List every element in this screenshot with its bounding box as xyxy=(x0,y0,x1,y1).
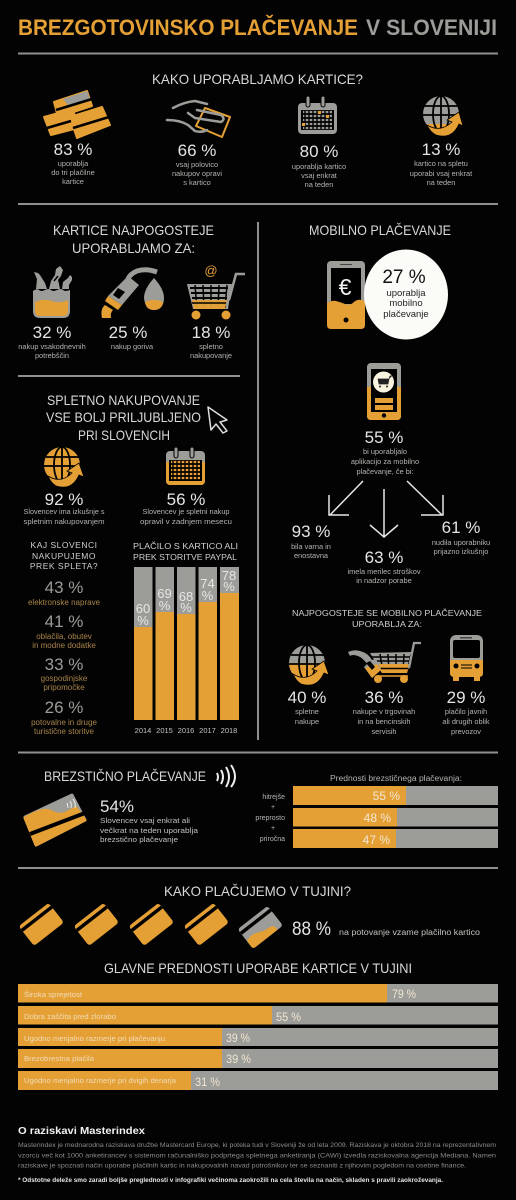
stat 88: 88 % xyxy=(292,919,331,940)
stat 55: plačevanje, če bi: xyxy=(356,467,414,476)
bar 2016: 68 xyxy=(179,589,193,604)
stat 54: večkrat na teden uporablja xyxy=(100,826,199,835)
heading: KARTICE NAJPOGOSTEJE xyxy=(53,222,214,238)
item 41: oblačila, obutev xyxy=(36,632,92,641)
stat 36: in na bencinskih xyxy=(357,717,411,726)
icon: calendar xyxy=(298,96,337,134)
panel: brezstično plačevanje xyxy=(25,765,498,848)
bar 39 b: Brezobrestna plačila xyxy=(24,1054,95,1063)
bar 2015: 69 xyxy=(157,586,172,601)
list: kaj slovenci nakupujemo xyxy=(28,540,101,736)
footer text: Masterindex je mednarodna raziskava družbe Mastercard Europe, ki poteka tudi v Sloveniji že od leta 2009. Raziskava je oktobra 2018 na reprezentativnem xyxy=(18,1143,496,1149)
bar 2015: % xyxy=(159,598,171,613)
stat 54: 54% xyxy=(100,797,134,816)
stat 54 xyxy=(100,797,199,844)
heading: UPORABLJAMO ZA: xyxy=(72,240,195,256)
arrow: left xyxy=(329,481,363,515)
bar preprosto: preprosto xyxy=(255,815,285,822)
chart title: Prednosti brezstičnega plačevanja: xyxy=(330,774,462,783)
list heading xyxy=(30,540,98,571)
bar preprosto xyxy=(255,808,498,826)
heading: BREZSTIČNO PLAČEVANJE xyxy=(44,768,206,784)
bar 2014 xyxy=(134,567,152,735)
chart heading xyxy=(133,541,238,562)
stat 63 xyxy=(347,548,421,585)
bar 55: Dobra zaščita pred zlorabo xyxy=(24,1012,116,1021)
stat 29: plačilo javnih xyxy=(445,707,487,716)
callout: 27 %: uporablja xyxy=(386,288,426,299)
bar 2015 xyxy=(156,567,174,735)
icon: calendar orange xyxy=(166,447,205,485)
icon: cart with at sign xyxy=(187,263,245,320)
bar chart: plačilo s kartico ali paypal xyxy=(133,541,239,735)
stat 54: Slovencev vsaj enkrat ali xyxy=(100,816,190,825)
chart heading: PREK STORITVE PAYPAL xyxy=(133,552,237,562)
callout: 27 %: 27 % xyxy=(382,267,426,288)
callout: 27 %: mobilno xyxy=(389,298,423,309)
stat 80: vsaj enkrat xyxy=(301,171,337,180)
item 41: 41 % xyxy=(45,612,83,631)
bar chart: prednosti brezstičnega plačevanja xyxy=(255,774,498,848)
chart heading: PLAČILO S KARTICO ALI xyxy=(133,541,238,551)
stat 56: 56 % xyxy=(167,490,205,509)
stat 25 xyxy=(109,323,154,351)
stat 40: nakupe xyxy=(295,717,319,726)
stat 83: kartice xyxy=(62,177,84,186)
footer text: raziskave je spoznati način uporabe plačilnih kartic in nakupovalnih navad potrošnikov ter se seznaniti z njihovim pogledom na osebne finance. xyxy=(18,1164,466,1170)
stat 63: in nadzor porabe xyxy=(356,576,412,585)
item 33 xyxy=(41,655,88,692)
stat 63: imela merilec stroškov xyxy=(347,567,421,576)
stat 29: ali drugih oblik xyxy=(442,717,490,726)
stat 13: 13 % xyxy=(422,140,460,159)
heading: KAKO PLAČUJEMO V TUJINI? xyxy=(164,883,351,899)
bar 2017: 74 xyxy=(200,576,215,591)
bar hitrejše: hitrejše xyxy=(262,794,285,801)
item 33: 33 % xyxy=(45,655,83,674)
stat 80 xyxy=(292,142,346,189)
bar 2015: 2015 xyxy=(156,726,173,735)
icon: cart with at sign: @ xyxy=(204,263,218,278)
stat 32: potrebščin xyxy=(35,351,69,360)
arrow: right xyxy=(407,481,443,515)
stat 40 xyxy=(288,688,326,726)
stat 18 xyxy=(190,323,232,360)
bar priročna: 47 % xyxy=(363,833,390,847)
item 41 xyxy=(32,612,96,650)
bar chart: prednosti brezstičnega plačevanja: + xyxy=(271,804,275,811)
stat 36: servisih xyxy=(371,727,397,736)
heading: SPLETNO NAKUPOVANJE xyxy=(47,392,200,408)
bar 2014: % xyxy=(137,613,149,628)
stat 83: 83 % xyxy=(54,140,92,159)
list heading: PREK SPLETA? xyxy=(30,561,98,571)
bar 79: 79 % xyxy=(392,987,416,1001)
icon: contactless waves xyxy=(217,765,235,787)
stat 55: bi uporabljalo xyxy=(363,447,407,456)
callout: 27 % xyxy=(364,250,448,340)
stat 13 xyxy=(410,140,472,187)
bar 2016: % xyxy=(180,600,192,615)
item 43: 43 % xyxy=(45,578,83,597)
icon: cart with pump xyxy=(348,643,421,683)
callout: 27 %: plačevanje xyxy=(383,309,429,320)
stat 83: uporablja xyxy=(58,159,89,168)
item 26: turistične storitve xyxy=(34,727,95,736)
stat 66: vsaj polovico xyxy=(176,160,218,169)
stat 18: nakupovanje xyxy=(190,351,232,360)
icon: bus xyxy=(450,635,483,681)
bar 39 a: Ugodno menjalno razmerje pri plačevanju xyxy=(24,1034,165,1043)
list heading: KAJ SLOVENCI xyxy=(31,540,97,550)
icon: jar with groceries xyxy=(33,266,72,318)
item 33: gospodinjske xyxy=(41,674,88,683)
icon: contactless card xyxy=(25,795,85,845)
footer: o raziskavi xyxy=(18,1125,496,1184)
stat 80: 80 % xyxy=(300,142,338,161)
stat 66: s kartico xyxy=(183,178,211,187)
stat 13: na teden xyxy=(427,178,455,187)
icon: phone with cart xyxy=(367,363,401,420)
stat 55 xyxy=(351,428,419,476)
stat 29: 29 % xyxy=(447,688,485,707)
panel: mobilno plačevanje xyxy=(288,222,490,736)
stat 36: 36 % xyxy=(365,688,403,707)
bar 39 a: 39 % xyxy=(226,1031,250,1045)
icon: card stack xyxy=(44,91,110,138)
panel: kartice najpogosteje xyxy=(18,222,245,360)
bar priročna: priročna xyxy=(260,836,285,843)
heading: MOBILNO PLAČEVANJE xyxy=(309,222,451,238)
item 43 xyxy=(28,578,101,607)
bar 79: Široka sprejetost xyxy=(24,990,83,999)
bar 31 xyxy=(18,1071,498,1090)
stat 92: spletnim nakupovanjem xyxy=(24,517,104,526)
item 43: elektronske naprave xyxy=(28,598,101,607)
heading: KAKO UPORABLJAMO KARTICE? xyxy=(152,71,363,87)
bar 2018: % xyxy=(223,579,235,594)
stat 61 xyxy=(432,518,490,556)
stat 93: 93 % xyxy=(292,522,330,541)
stat 25: 25 % xyxy=(109,323,147,342)
stat 93: bila varna in xyxy=(291,542,331,551)
stat 88: na potovanje vzame plačilno kartico xyxy=(339,928,481,937)
item 26 xyxy=(31,698,97,736)
stat 56: opravil v zadnjem mesecu xyxy=(140,517,232,526)
stat 32: 32 % xyxy=(33,323,71,342)
heading: GLAVNE PREDNOSTI UPORABE KARTICE V TUJINI xyxy=(104,960,412,976)
bar 2016: 2016 xyxy=(178,726,194,735)
stat 40: spletne xyxy=(295,707,319,716)
heading: VSE BOLJ PRILJUBLJENO xyxy=(46,409,201,425)
stat 92: Slovencev ima izkušnje s xyxy=(24,507,105,516)
stat 80: uporablja kartico xyxy=(292,162,346,171)
title: V SLOVENIJI xyxy=(366,15,497,40)
icon: globe half xyxy=(289,645,329,685)
stat 88 xyxy=(292,919,481,940)
item 41: in modne dodatke xyxy=(32,641,96,650)
bar 2018: 2018 xyxy=(221,726,237,735)
item 26: 26 % xyxy=(45,698,83,717)
stat 55: 55 % xyxy=(365,428,403,447)
bar 31: Ugodno menjalno razmerje pri dvigih denarja xyxy=(24,1076,177,1085)
icon: card 4 xyxy=(184,903,229,946)
stat 29: prevozov xyxy=(451,727,481,736)
item 33: pripomočke xyxy=(43,683,85,692)
bar preprosto: 48 % xyxy=(364,811,391,825)
stat 93: enostavna xyxy=(294,551,329,560)
stat 92 xyxy=(24,490,105,526)
bar 79 xyxy=(18,984,498,1002)
footer text: vzorcu več kot 1000 anketirancev s sistemom računalniško podprtega spletnega anketiranja (CAWI) izvedla raziskovalna agencija Mediana. Namen xyxy=(18,1154,496,1160)
bar 2016 xyxy=(177,567,196,735)
footer text xyxy=(18,1143,496,1170)
stat 61: nudila uporabniku xyxy=(432,538,490,547)
stat 29 xyxy=(442,688,490,736)
list heading: NAKUPUJEMO xyxy=(32,551,96,561)
subheading: NAJPOGOSTEJE SE MOBILNO PLAČEVANJE xyxy=(292,608,482,618)
panel: kako uporabljamo kartice xyxy=(44,71,472,189)
bar 2018 xyxy=(220,567,239,735)
bar chart: prednosti brezstičnega plačevanja: + xyxy=(271,825,275,832)
bar 2014: 2014 xyxy=(135,726,151,735)
bar 39 b xyxy=(18,1049,498,1068)
icon: card 3 xyxy=(129,903,174,946)
bar 2014: 60 xyxy=(136,601,150,616)
icon: globe xyxy=(423,96,463,136)
stat 40: 40 % xyxy=(288,688,326,707)
bar 2017: % xyxy=(202,588,214,603)
stat 66: 66 % xyxy=(178,141,216,160)
stat 54: brezstično plačevanje xyxy=(100,835,178,844)
stat 25: nakup goriva xyxy=(111,342,154,351)
stat 13: kartico na spletu xyxy=(414,159,468,168)
bar 39 b: 39 % xyxy=(226,1052,251,1066)
icon: cursor xyxy=(208,407,227,433)
panel: glavne prednosti xyxy=(18,960,498,1090)
stat 18: spletno xyxy=(199,342,223,351)
heading: PRI SLOVENCIH xyxy=(78,427,170,443)
footer heading: O raziskavi Masterindex xyxy=(18,1125,145,1137)
panel: kako plačujemo v tujini xyxy=(19,883,481,949)
panel: spletno nakupovanje xyxy=(24,392,239,736)
title: BREZGOTOVINSKO PLAČEVANJE xyxy=(18,15,358,40)
bar 2018: 78 xyxy=(222,568,236,583)
stat 80: na teden xyxy=(305,180,333,189)
stat 32 xyxy=(18,323,86,360)
stat 56 xyxy=(140,490,232,526)
arrow: center xyxy=(370,489,398,537)
icon: card 1 xyxy=(19,903,64,946)
icon: globe orange xyxy=(44,447,84,487)
stat 92: 92 % xyxy=(45,490,83,509)
stat 66 xyxy=(172,141,222,187)
stat 66: nakupov opravi xyxy=(172,169,222,178)
stat 93 xyxy=(291,522,331,560)
stat 61: prijazno izkušnjo xyxy=(434,547,488,556)
bar 2017: 2017 xyxy=(199,726,216,735)
bar priročna xyxy=(260,829,498,848)
icon: hand with card xyxy=(167,101,230,137)
stat 63: 63 % xyxy=(365,548,403,567)
icon: phone with euro: € xyxy=(339,274,352,300)
stat 83: do tri plačilne xyxy=(51,168,95,177)
icon: phone with euro xyxy=(327,261,365,329)
stat 83 xyxy=(51,140,95,186)
subheading: UPORABLJA ZA: xyxy=(352,619,422,629)
icon: card 2 xyxy=(74,903,119,946)
stat 56: Slovencev je spletni nakup xyxy=(142,507,230,516)
stat 36: nakupe v trgovinah xyxy=(353,707,415,716)
stat 36 xyxy=(353,688,415,736)
bar 2017 xyxy=(198,567,217,735)
stat 61: 61 % xyxy=(442,518,480,537)
bar hitrejše: 55 % xyxy=(373,789,400,803)
bar 55: 55 % xyxy=(276,1010,301,1024)
stat 13: uporabi vsaj enkrat xyxy=(410,169,472,178)
footnote: * Odstotne deleže smo zaradi boljše preglednosti v infografiki večinoma zaokrožili na cela števila na način, skladen s pravili zaokroževanja. xyxy=(18,1178,443,1184)
bar hitrejše xyxy=(262,786,498,805)
subheading xyxy=(292,608,482,629)
stat 32: nakup vsakodnevnih xyxy=(18,342,86,351)
stat 18: 18 % xyxy=(192,323,230,342)
bar 55 xyxy=(18,1006,498,1024)
icon: fuel pump and drop xyxy=(101,270,164,318)
bar 31: 31 % xyxy=(195,1075,220,1089)
bar 39 a xyxy=(18,1028,498,1046)
item 26: potovalne in druge xyxy=(31,718,97,727)
stat 55: aplikacijo za mobilno xyxy=(351,457,419,466)
icon: card 5 partial xyxy=(238,906,283,949)
